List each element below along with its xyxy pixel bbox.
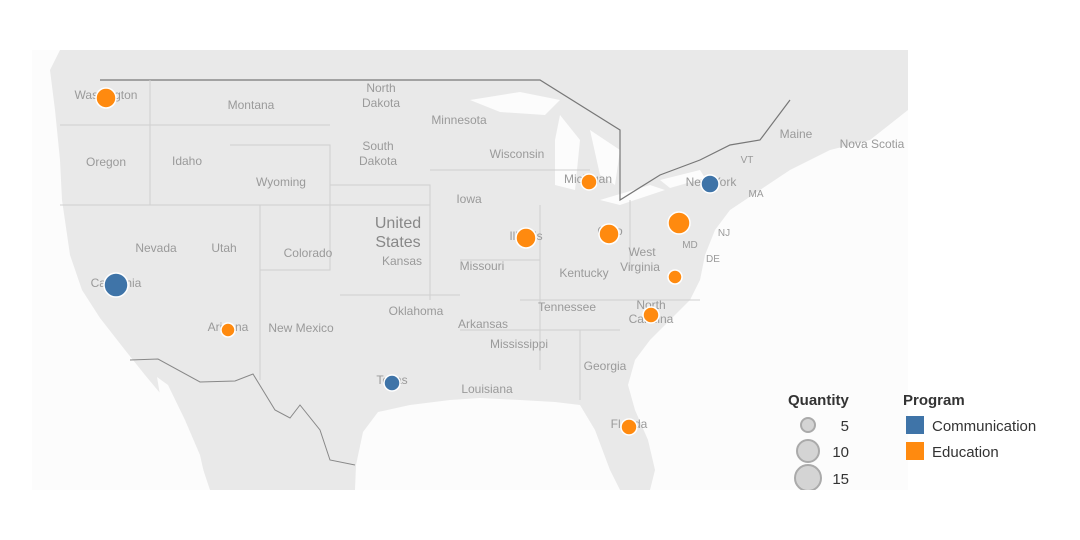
state labels: Wisconsin bbox=[490, 147, 544, 161]
map background bbox=[32, 50, 908, 490]
legend: program: Communication bbox=[932, 418, 1036, 435]
state labels: Wyoming bbox=[256, 175, 306, 189]
state labels: Maine bbox=[780, 127, 813, 141]
state labels: DE bbox=[706, 254, 720, 265]
state labels: Mississippi bbox=[490, 337, 548, 351]
state labels: Texas bbox=[376, 373, 408, 387]
legend: quantity: Quantity bbox=[788, 392, 849, 409]
state labels: North bbox=[366, 81, 396, 95]
state labels: Dakota bbox=[362, 96, 400, 110]
state labels: NJ bbox=[718, 228, 730, 239]
state labels: United bbox=[375, 215, 421, 232]
state labels: Missouri bbox=[460, 259, 504, 273]
state labels: North bbox=[636, 298, 666, 312]
state labels: Minnesota bbox=[431, 113, 487, 127]
state labels: New Mexico bbox=[268, 321, 334, 335]
state labels: States bbox=[375, 234, 421, 251]
state labels: Kansas bbox=[382, 254, 422, 268]
legend: quantity: 5 bbox=[841, 418, 849, 435]
state labels bbox=[75, 81, 905, 431]
state labels: Nova Scotia bbox=[840, 137, 905, 151]
state labels: Virginia bbox=[620, 260, 660, 274]
state labels: Colorado bbox=[284, 246, 333, 260]
state labels: Arkansas bbox=[458, 317, 508, 331]
state labels: Kentucky bbox=[559, 266, 609, 280]
state labels: Illinois bbox=[509, 229, 543, 243]
state labels: Louisiana bbox=[461, 382, 513, 396]
state labels: Oklahoma bbox=[389, 304, 444, 318]
legend: quantity: 10 bbox=[832, 444, 849, 461]
state labels: Oregon bbox=[86, 155, 126, 169]
gulf of california bbox=[157, 377, 206, 482]
state labels: VT bbox=[741, 155, 753, 166]
great lakes bbox=[470, 92, 705, 205]
state labels: Nevada bbox=[135, 241, 177, 255]
state labels: California bbox=[91, 276, 142, 290]
legend: program bbox=[903, 392, 1036, 461]
state labels: Georgia bbox=[584, 359, 627, 373]
legend: program: Education bbox=[932, 444, 999, 461]
state labels: South bbox=[362, 139, 394, 153]
data circles bbox=[96, 88, 719, 435]
state labels: Tennessee bbox=[538, 300, 596, 314]
state labels: Idaho bbox=[172, 154, 202, 168]
state labels: Washington bbox=[75, 88, 137, 102]
state labels: Ohio bbox=[597, 224, 623, 238]
legend: quantity bbox=[780, 392, 860, 510]
state labels: Montana bbox=[228, 98, 275, 112]
state labels: Iowa bbox=[456, 192, 482, 206]
state labels: MD bbox=[682, 240, 698, 251]
state labels: Dakota bbox=[359, 154, 397, 168]
state labels: West bbox=[628, 245, 656, 259]
state labels: Carolina bbox=[629, 312, 674, 326]
legend: program: Program bbox=[903, 392, 965, 409]
state labels: Michigan bbox=[564, 172, 612, 186]
legend: quantity: 15 bbox=[832, 471, 849, 488]
borders bbox=[100, 80, 790, 200]
state labels: Florida bbox=[611, 417, 648, 431]
state labels: Utah bbox=[211, 241, 237, 255]
state labels: New York bbox=[686, 175, 737, 189]
state labels: MA bbox=[748, 189, 764, 200]
state labels: Arizona bbox=[208, 320, 249, 334]
